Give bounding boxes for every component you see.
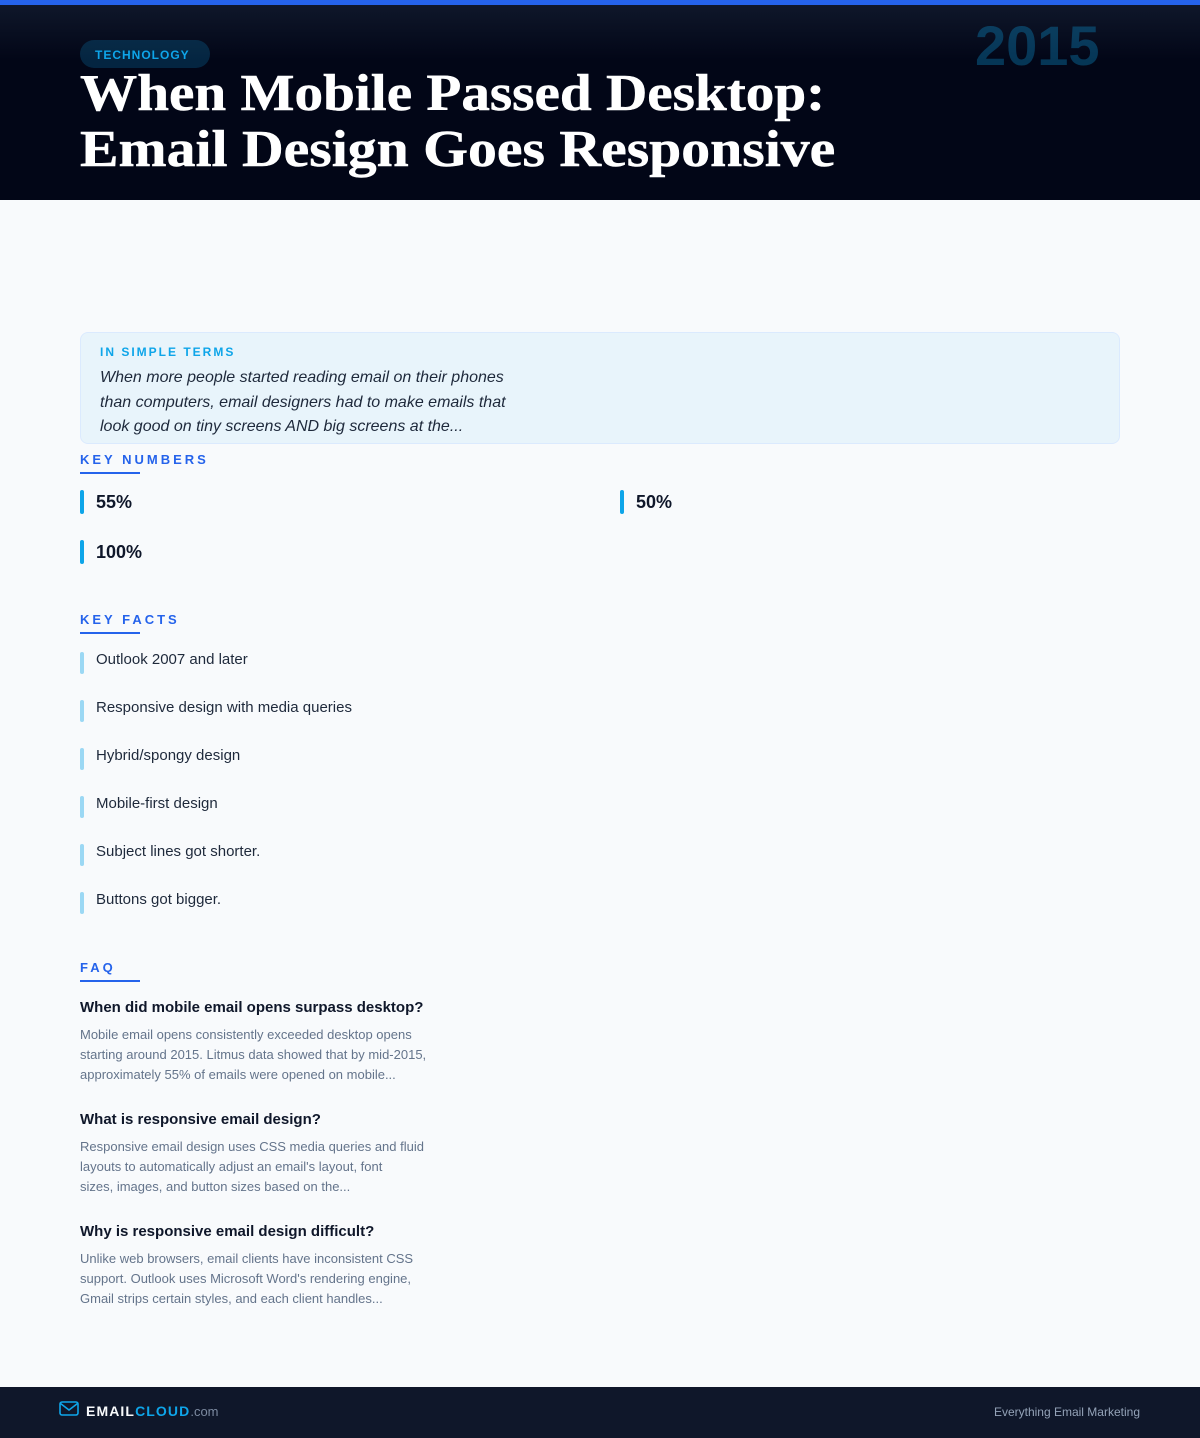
faq 3: Gmail strips certain styles, and each client handles... — [80, 1291, 383, 1306]
year watermark: 2015 — [975, 14, 1100, 77]
footer tagline: Everything Email Marketing — [994, 1405, 1140, 1419]
faq 1: When did mobile email opens surpass desktop? — [80, 999, 423, 1016]
faq 3: support. Outlook uses Microsoft Word's rendering engine, — [80, 1271, 411, 1286]
fact 3 — [80, 747, 240, 770]
fact 6 — [80, 891, 221, 914]
fact 3: Hybrid/spongy design — [96, 747, 240, 764]
fact 6: Buttons got bigger. — [96, 891, 221, 908]
faq 2 — [80, 1111, 424, 1194]
panel text: When more people started reading email on their phones — [100, 369, 504, 386]
faq 2: sizes, images, and button sizes based on the... — [80, 1179, 350, 1194]
faq 1: starting around 2015. Litmus data showed that by mid-2015, — [80, 1047, 426, 1062]
fact 1 — [80, 651, 248, 674]
faq 1: approximately 55% of emails were opened on mobile... — [80, 1067, 396, 1082]
stat: 50% — [620, 490, 672, 514]
fact 4: Mobile-first design — [96, 795, 218, 812]
faq 2: layouts to automatically adjust an email's layout, font — [80, 1159, 382, 1174]
footer — [0, 1387, 1200, 1438]
fact 4 — [80, 795, 218, 818]
faq 2: Responsive email design uses CSS media queries and fluid — [80, 1139, 424, 1154]
panel text: than computers, email designers had to make emails that — [100, 394, 506, 410]
title: When Mobile Passed Desktop: — [80, 65, 825, 122]
stat: 50%: 50% — [636, 492, 672, 512]
fact 2 — [80, 699, 352, 722]
faq 3 — [80, 1223, 413, 1306]
section: key facts heading: KEY FACTS — [80, 612, 180, 627]
faq 3: Unlike web browsers, email clients have inconsistent CSS — [80, 1251, 413, 1266]
fact 5: Subject lines got shorter. — [96, 843, 260, 860]
section: key numbers heading: KEY NUMBERS — [80, 452, 209, 467]
faq 1: Mobile email opens consistently exceeded desktop opens — [80, 1027, 412, 1042]
faq 1 — [80, 999, 426, 1082]
stat: 55%: 55% — [96, 492, 132, 512]
fact 2: Responsive design with media queries — [96, 699, 352, 716]
header banner — [0, 0, 1200, 200]
stat: 100%: 100% — [96, 542, 142, 562]
category label: TECHNOLOGY — [95, 48, 190, 62]
brand wordmark: EMAILCLOUD.com — [86, 1403, 219, 1419]
stat: 100% — [80, 540, 142, 564]
icon: envelope — [59, 1401, 79, 1416]
panel heading: IN SIMPLE TERMS — [100, 345, 235, 359]
top accent bar — [0, 0, 1200, 5]
title: Email Design Goes Responsive — [80, 121, 835, 178]
panel text: look good on tiny screens AND big screens at the... — [100, 418, 463, 435]
faq 2: What is responsive email design? — [80, 1111, 321, 1128]
panel text — [100, 369, 506, 435]
fact 5 — [80, 843, 260, 866]
section: faq heading: FAQ — [80, 960, 116, 975]
faq 3: Why is responsive email design difficult? — [80, 1223, 374, 1240]
panel: in simple terms — [80, 332, 1120, 444]
title — [80, 65, 835, 178]
stat: 55% — [80, 490, 132, 514]
fact 1: Outlook 2007 and later — [96, 651, 248, 668]
category badge — [80, 40, 210, 68]
